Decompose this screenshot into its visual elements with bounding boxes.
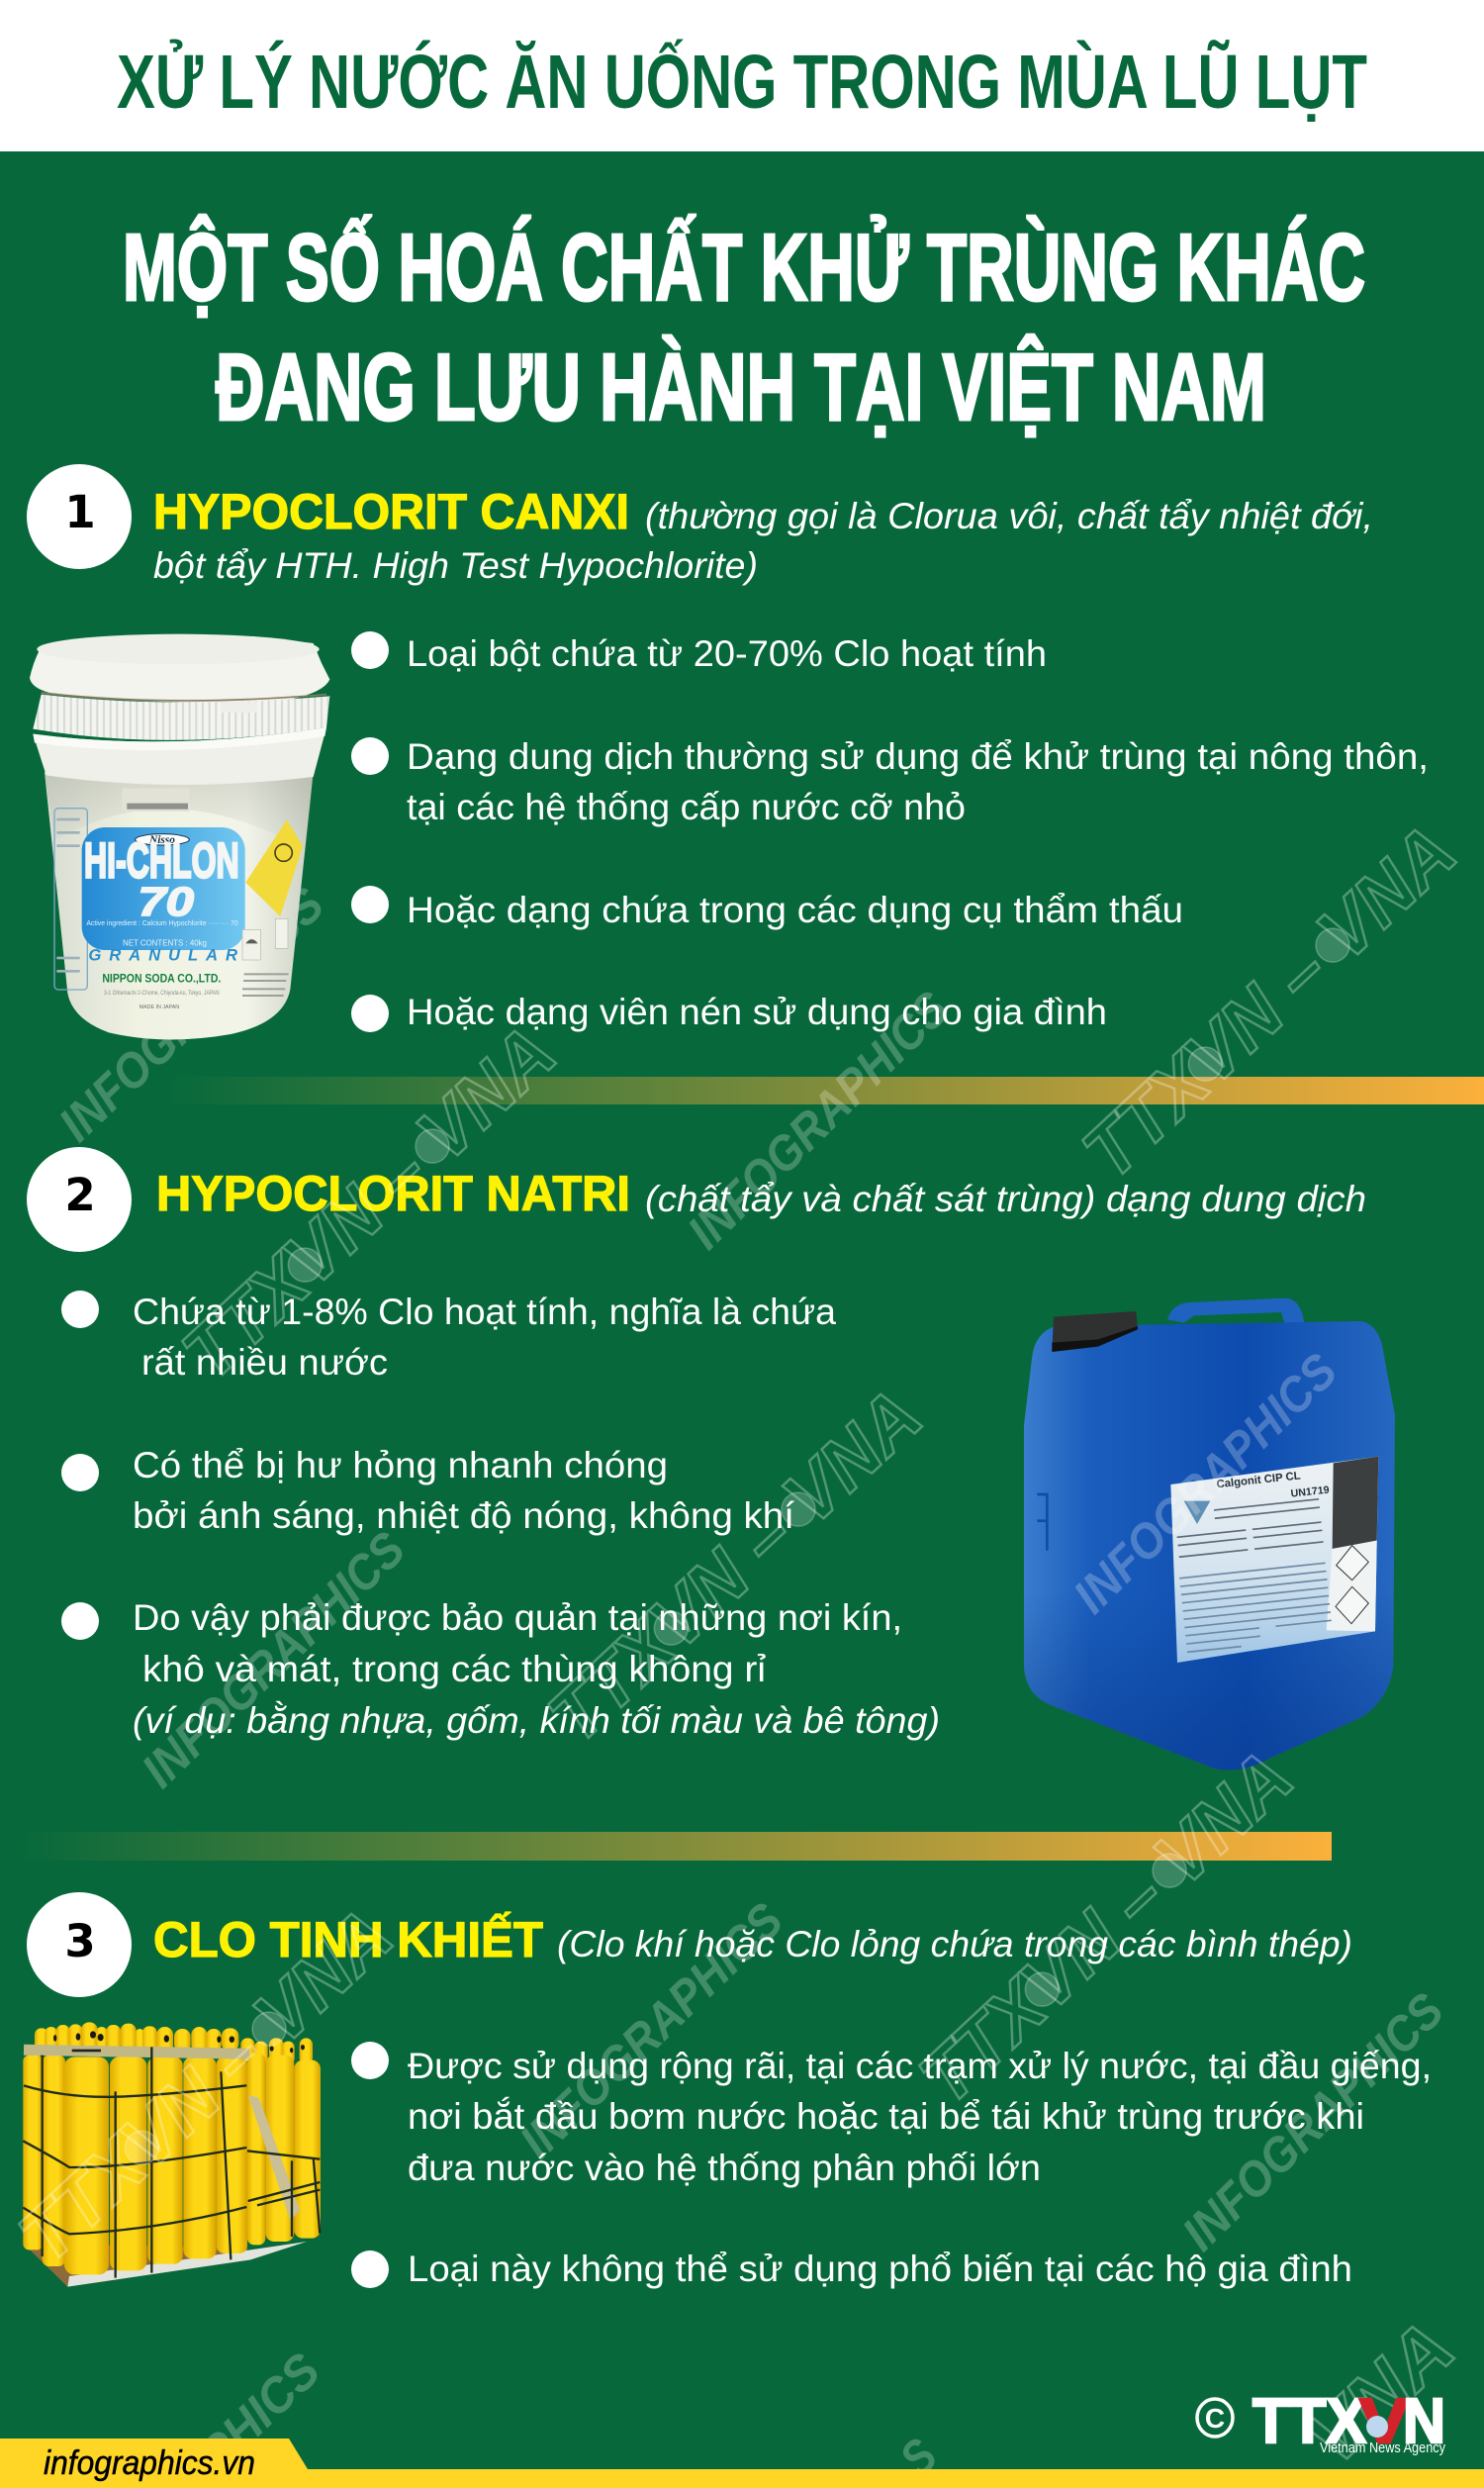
image: Hi-Chlon bucket: Nisso: [148, 834, 175, 846]
bullet 1.2: Dạng dung dịch thường sử dụng để khử trùng tại nông thôn,: [407, 736, 1429, 777]
bullet 2.3: Do vậy phải được bảo quản tại những nơi kín,: [133, 1597, 902, 1638]
section 1 bullets: [351, 631, 1429, 1032]
watermark: INFOGRAPHICS group: INFOGRAPHICS: [510, 1892, 793, 2169]
section 1 subtitle: (thường gọi là Clorua vôi, chất tẩy nhiệt đới,: [645, 496, 1373, 536]
bullet 3.2: Loại này không thể sử dụng phổ biến tại các hộ gia đình: [408, 2249, 1352, 2289]
image: Hi-Chlon bucket: NET CONTENTS : 40kg: [123, 938, 207, 947]
watermark: TTXVN VNA group: TTXVN – VNA: [533, 1374, 938, 1759]
watermark: TTXVN VNA group: [4, 810, 1472, 2481]
bullet 1.3: Hoặc dạng chứa trong các dụng cụ thẩm thấu: [407, 890, 1183, 930]
image: Hi-Chlon bucket: [30, 634, 329, 1039]
section 2 subtitle: (chất tẩy và chất sát trùng) dạng dung dịch: [645, 1179, 1366, 1219]
divider bar 1: [168, 1077, 1484, 1104]
number badge 1: 1: [64, 486, 96, 538]
number badge 2: 2: [64, 1169, 96, 1221]
agency wordmark: V: [1359, 2385, 1409, 2456]
watermark: TTXVN VNA group: TTXVN – VNA: [167, 1010, 572, 1395]
section 3 subtitle: (Clo khí hoặc Clo lỏng chứa trong các bình thép): [557, 1924, 1352, 1964]
watermark: INFOGRAPHICS group: S: [889, 2428, 948, 2487]
watermark: TTXVN VNA group: VNA: [1290, 2305, 1470, 2481]
watermark: INFOGRAPHICS group: PHICS: [189, 2343, 330, 2482]
section 2 bullets: [61, 1291, 940, 1741]
bullet 1.1: Loại bột chứa từ 20-70% Clo hoạt tính: [407, 633, 1047, 674]
main heading: [123, 214, 1365, 440]
section 1 heading: HYPOCLORIT CANXI: [153, 484, 629, 539]
watermark: INFOGRAPHICS group: INFOGRAPHICS: [132, 1521, 416, 1798]
section 1 header: [27, 464, 1373, 586]
image: blue chemical jerrycan: [1024, 1298, 1395, 1770]
watermark: TTXVN VNA group: TTXVN – VNA: [1067, 810, 1472, 1195]
image: Hi-Chlon bucket: NIPPON SODA CO.,LTD.: [102, 972, 221, 986]
bullet 3.1: Được sử dụng rộng rãi, tại các trạm xử lý nước, tại đầu giếng,: [408, 2046, 1432, 2086]
number badge 1: [27, 464, 132, 569]
footer yellow band: [0, 2439, 1484, 2488]
agency tagline: Vietnam News Agency: [1320, 2440, 1445, 2456]
bullet 2.3: [61, 1597, 940, 1741]
watermark: INFOGRAPHICS group: INFOGRAPHICS: [1171, 1982, 1454, 2261]
copyright symbol: C: [1205, 2403, 1225, 2434]
footer website: infographics.vn: [44, 2444, 255, 2482]
image: blue chemical jerrycan: UN1719: [1290, 1484, 1330, 1500]
bullet 2.2: [61, 1445, 795, 1536]
bullet 1.2: [351, 736, 1429, 827]
image: Hi-Chlon bucket: MADE IN JAPAN: [139, 1005, 179, 1010]
bullet 3.1: đưa nước vào hệ thống phân phối lớn: [408, 2148, 1041, 2188]
bullet 2.1: [61, 1291, 836, 1383]
watermark behind bucket: INFOGRAPHICS: [48, 877, 334, 1152]
image: Hi-Chlon bucket: 3-1 Ohtemachi 2-Chome, Chiyoda-ku, Tokyo, JAPAN: [104, 991, 220, 997]
bullet 2.3: (ví dụ: bằng nhựa, gốm, kính tối màu và bê tông): [133, 1700, 940, 1741]
section 3 header: [27, 1892, 1352, 1997]
bullet 2.2: bởi ánh sáng, nhiệt độ nóng, không khí: [133, 1495, 795, 1536]
bullet 2.3: khô và mát, trong các thùng không rỉ: [142, 1649, 766, 1689]
agency wordmark: [1252, 2385, 1445, 2456]
bullet 2.2: Có thể bị hư hỏng nhanh chóng: [133, 1445, 668, 1485]
copyright symbol: [1197, 2399, 1233, 2437]
bullet 1.2: tại các hệ thống cấp nước cỡ nhỏ: [407, 787, 966, 827]
agency wordmark: TTX: [1252, 2385, 1366, 2456]
watermark: TTXVN VNA group: TTXVN – VNA: [4, 1893, 409, 2278]
section 2 heading: HYPOCLORIT NATRI: [156, 1166, 630, 1221]
bullet 3.1: [351, 2042, 1432, 2188]
image: Hi-Chlon bucket: GRANULAR: [88, 946, 237, 965]
section 1 subtitle: bột tẩy HTH. High Test Hypochlorite): [153, 545, 758, 586]
section 3 bullets: [351, 2042, 1432, 2289]
watermark: INFOGRAPHICS group: [132, 981, 1454, 2487]
watermark: INFOGRAPHICS group: INFOGRAPHICS: [677, 981, 960, 1260]
watermark: TTXVN VNA group: TTXVN – VNA: [904, 1735, 1309, 2120]
agency wordmark: N: [1403, 2385, 1445, 2456]
number badge 2: [27, 1147, 132, 1252]
bullet 2.1: rất nhiều nước: [141, 1342, 388, 1383]
section 3 heading: CLO TINH KHIẾT: [153, 1912, 543, 1967]
image: Hi-Chlon bucket: HI-CHLON: [84, 833, 239, 889]
logo: TTXVN: [1197, 2385, 1445, 2456]
watermark: INFOGRAPHICS group: INFOGRAPHICS: [1063, 1343, 1347, 1624]
section 1 subtitle: [153, 496, 1373, 586]
image: blue chemical jerrycan: Calgonit CIP CL: [1216, 1470, 1301, 1490]
number badge 3: 3: [64, 1915, 96, 1967]
section 2 header: [27, 1147, 1366, 1252]
header band: [0, 0, 1484, 151]
image: Hi-Chlon bucket: Active ingredient : Calcium Hypochlorite ········· 70: [86, 918, 238, 927]
number badge 3: [27, 1892, 132, 1997]
bullet 2.1: Chứa từ 1-8% Clo hoạt tính, nghĩa là chứa: [133, 1292, 836, 1332]
image: yellow chlorine cylinders on pallet: [23, 2022, 321, 2287]
divider bar 2: [20, 1832, 1332, 1861]
bullet 3.1: nơi bắt đầu bơm nước hoặc tại bể tái khử trùng trước khi: [408, 2096, 1364, 2137]
bullet 1.4: Hoặc dạng viên nén sử dụng cho gia đình: [407, 992, 1107, 1032]
image: Hi-Chlon bucket: 70: [138, 879, 194, 924]
